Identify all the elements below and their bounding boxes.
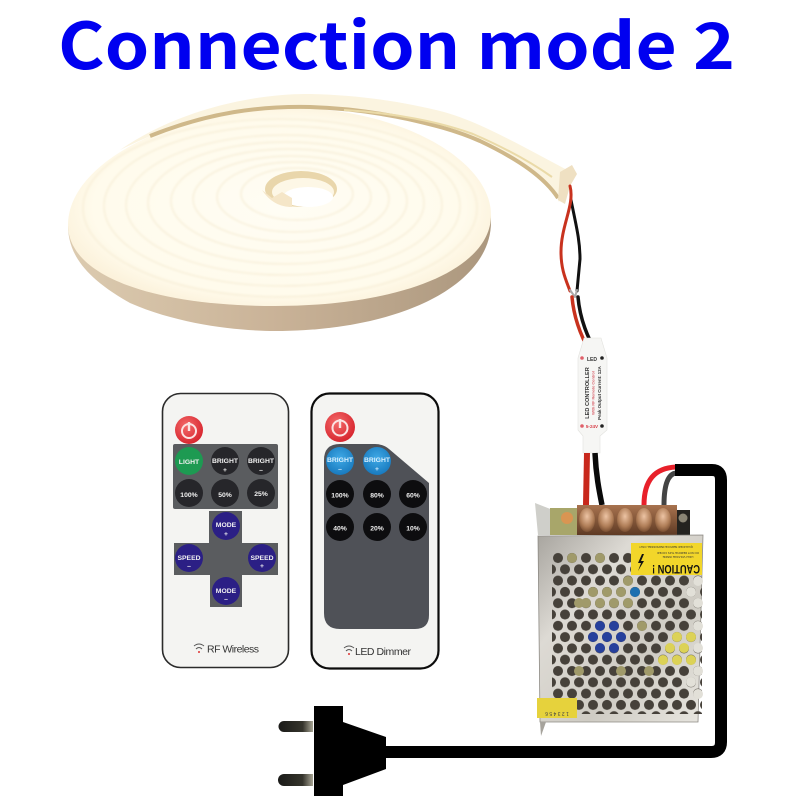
yellow components through holes: [658, 632, 696, 665]
LIGHT button: [175, 447, 203, 475]
SPEED plus button: [248, 544, 276, 572]
BRIGHT plus button: +: [375, 466, 379, 473]
LED neon strip coil: [68, 94, 577, 331]
SPEED minus button: –: [187, 563, 191, 570]
BRIGHT plus button: +: [223, 467, 227, 474]
MODE minus button: MODE: [216, 588, 237, 595]
controller name: LED CONTROLLER: [585, 367, 591, 419]
100% button: 100%: [180, 492, 198, 499]
MODE plus button: [212, 512, 240, 540]
strip tail: [120, 94, 573, 202]
caution fine print: [639, 545, 699, 559]
AC input wires: [644, 467, 676, 505]
SPEED minus button: [175, 544, 203, 572]
coil side wall: [68, 215, 491, 331]
power button: [175, 416, 203, 444]
strip lead wires: [561, 186, 597, 354]
tail lit edge: [344, 110, 552, 177]
LED Dimmer label: LED Dimmer: [355, 646, 412, 658]
peak current note: Peak Output Current: 12A: [597, 365, 602, 420]
controller body: [578, 338, 607, 453]
LIGHT button: LIGHT: [179, 459, 200, 466]
BRIGHT plus button: [211, 447, 239, 475]
BRIGHT minus button: –: [338, 466, 342, 473]
controller port dots top: [580, 356, 604, 360]
100% button: [175, 479, 203, 507]
caution label: [631, 543, 702, 575]
BRIGHT minus button: [326, 447, 354, 475]
remote control note: With RF Remote Control: [592, 371, 596, 415]
80% button: [363, 480, 391, 508]
20% button: 20%: [370, 526, 384, 532]
25% button: 25%: [254, 491, 268, 498]
plug: [278, 706, 386, 796]
LED marking: LED: [587, 357, 597, 363]
controller output wires: [586, 453, 602, 505]
inner strip end: [262, 190, 292, 207]
coil centre hole: [265, 171, 337, 207]
tail end cap: [558, 165, 577, 204]
caution fine print: HIGH VOLTAGE INSIDE: [663, 555, 693, 559]
coil windings: [83, 119, 477, 297]
10% button: 10%: [406, 526, 420, 532]
BRIGHT plus button: BRIGHT: [364, 457, 391, 464]
MODE minus button: –: [224, 596, 228, 603]
terminal number label: 1 2 3 4 5 6: [545, 710, 569, 716]
remote body: [312, 394, 438, 668]
coil top surface: [68, 108, 491, 306]
plug flange: [314, 706, 343, 796]
10% button: [399, 513, 427, 541]
earth terminal: [677, 510, 690, 535]
SPEED plus button: +: [260, 563, 264, 570]
25% button: [247, 479, 275, 507]
caution fine print: DO NOT REMOVE THIS COVER: [657, 551, 699, 555]
power supply: [535, 503, 703, 736]
50% button: [211, 479, 239, 507]
60% button: [399, 480, 427, 508]
BRIGHT plus button: BRIGHT: [212, 458, 239, 465]
tail LED channel: [150, 107, 558, 198]
50% button: 50%: [218, 492, 232, 499]
grey input wire: [664, 473, 676, 505]
lower mounting tab: [540, 722, 546, 736]
wire joints: [570, 290, 577, 297]
controller port dots bottom: [580, 424, 604, 428]
lower red wire: [572, 297, 590, 352]
SPEED minus button: SPEED: [177, 555, 201, 562]
60% button: 60%: [406, 492, 420, 500]
upper black wire: [571, 200, 580, 291]
blue components through holes: [588, 587, 640, 653]
20% button: [363, 513, 391, 541]
red input wire: [644, 467, 676, 505]
MODE minus button: [212, 577, 240, 605]
100% button: 100%: [331, 492, 349, 500]
supply circuit board: [550, 508, 578, 535]
40% button: 40%: [333, 526, 347, 532]
cross button panel: [174, 511, 278, 607]
potentiometer: [561, 512, 573, 524]
metal cover: [538, 535, 703, 722]
shiny holes on the right: [686, 576, 703, 699]
top button panel: [173, 444, 278, 509]
lightning bolt: [638, 554, 644, 571]
power button: [325, 412, 355, 442]
plug pins: [278, 721, 313, 786]
wireless icon: [344, 646, 354, 655]
voltage marking: 5-24V: [586, 424, 599, 429]
BRIGHT minus button: BRIGHT: [327, 457, 354, 464]
40% button: [326, 513, 354, 541]
plug body: [343, 722, 386, 785]
80% button: 80%: [370, 492, 384, 500]
LED controller: [578, 338, 607, 453]
power cord: [380, 470, 721, 752]
terminal block: [577, 505, 677, 535]
BRIGHT plus button: [363, 447, 391, 475]
caution fine print: QUALIFIED SERVICE PERSONNEL ONLY: [639, 545, 693, 549]
BRIGHT minus button: –: [259, 467, 263, 474]
ventilation holes: [552, 552, 702, 714]
caution heading: CAUTION !: [652, 562, 700, 574]
hole inner band: [272, 178, 334, 206]
RF Wireless label: RF Wireless: [207, 644, 259, 656]
red output wire: [586, 453, 587, 505]
terminal screws: [579, 508, 671, 532]
olive holes: [567, 553, 654, 676]
100% button: [326, 480, 354, 508]
upper red wire: [561, 186, 571, 291]
wireless icon: [194, 644, 204, 653]
lower black wire: [578, 297, 597, 354]
remote body: [162, 394, 288, 668]
BRIGHT minus button: BRIGHT: [248, 458, 275, 465]
MODE plus button: MODE: [216, 522, 237, 529]
black output wire: [595, 453, 602, 505]
remote: LED Dimmer: [312, 394, 438, 668]
remote: RF Wireless: [162, 394, 288, 668]
hole opening: [283, 187, 333, 207]
button panel: [324, 444, 429, 629]
terminal number label: [537, 698, 577, 718]
BRIGHT minus button: [247, 447, 275, 475]
SPEED plus button: SPEED: [250, 555, 274, 562]
MODE plus button: +: [224, 531, 228, 538]
left mounting bracket: [535, 503, 578, 535]
